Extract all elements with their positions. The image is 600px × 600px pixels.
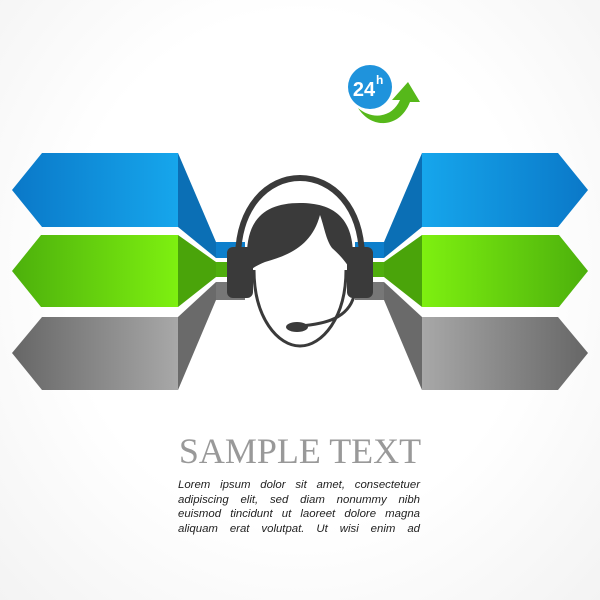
right arrows (355, 153, 588, 390)
blue arrow right (355, 153, 588, 258)
gray arrow right (355, 282, 588, 390)
green arrow left (12, 235, 245, 307)
blue arrow left (12, 153, 245, 258)
green arrow right (355, 235, 588, 307)
title: SAMPLE TEXT (179, 431, 421, 471)
icon: operator with headset (227, 178, 373, 346)
body text: Lorem ipsum dolor sit amet, consectetuer adipiscing elit, sed diam nonummy nibh euismod tincidunt ut laoreet dolore magna aliquam erat volutpat. Ut wisi enim ad (178, 479, 420, 534)
icon: 24h badge: 24 (353, 79, 376, 101)
left arrows (12, 153, 245, 390)
icon: 24h badge (348, 65, 420, 123)
icon: 24h badge: h (376, 73, 383, 87)
gray arrow left (12, 282, 245, 390)
